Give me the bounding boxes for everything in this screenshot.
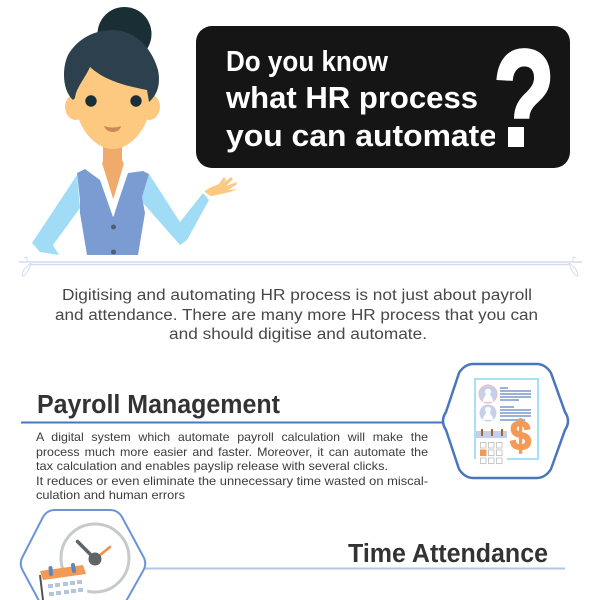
hair xyxy=(64,30,159,102)
title panel xyxy=(196,22,570,176)
text lines xyxy=(500,388,531,420)
title text: you can automate xyxy=(226,118,497,153)
neck and collar xyxy=(100,146,128,217)
hair bun xyxy=(98,7,152,61)
attendance connector line xyxy=(145,568,565,570)
attendance heading: Time Attendance xyxy=(348,540,548,568)
face xyxy=(65,65,160,149)
black background xyxy=(196,26,570,168)
payroll heading: Payroll Management xyxy=(37,391,280,419)
title text xyxy=(225,46,497,153)
payroll description: tax calculation and enables payslip release with several clicks. xyxy=(36,460,388,473)
payroll connector line xyxy=(21,422,445,424)
title text: what HR process xyxy=(225,80,478,115)
section: time attendance xyxy=(21,510,565,600)
mini calendar xyxy=(476,429,507,464)
intro text: Digitising and automating HR process is not just about payroll xyxy=(62,287,532,304)
sleeves and hand xyxy=(32,174,238,255)
payroll description: It reduces or even eliminate the unnecessary time wasted on miscal- xyxy=(36,475,428,488)
calendar xyxy=(40,565,88,600)
payroll description: process much more easier and faster. Moreover, it can automate the xyxy=(36,446,428,459)
mouth xyxy=(104,126,121,132)
vest xyxy=(77,169,149,255)
profile photos xyxy=(479,385,497,422)
intro text: and attendance. There are many more HR process that you can xyxy=(55,307,538,324)
icon: clock and calendar in hexagon xyxy=(21,510,145,600)
section: payroll management xyxy=(21,364,568,502)
document xyxy=(475,379,538,459)
intro text xyxy=(55,287,538,343)
character: woman presenting xyxy=(32,7,238,255)
hexagon frame xyxy=(21,510,145,600)
payroll description: A digital system which automate payroll calculation will make the xyxy=(36,431,428,444)
vest buttons xyxy=(111,224,116,254)
title text: Do you know xyxy=(226,46,388,78)
question mark: ? xyxy=(493,22,555,176)
payroll description: culation and human errors xyxy=(36,489,185,502)
dollar sign: $ xyxy=(510,412,531,459)
payroll description xyxy=(36,431,428,502)
icon: payroll document in hexagon xyxy=(443,364,568,478)
clock face xyxy=(61,524,129,592)
ornamental divider xyxy=(19,257,582,276)
intro text: and should digitise and automate. xyxy=(169,326,427,343)
clock hands xyxy=(78,542,110,566)
hexagon frame xyxy=(443,364,568,478)
eyes xyxy=(85,95,142,107)
